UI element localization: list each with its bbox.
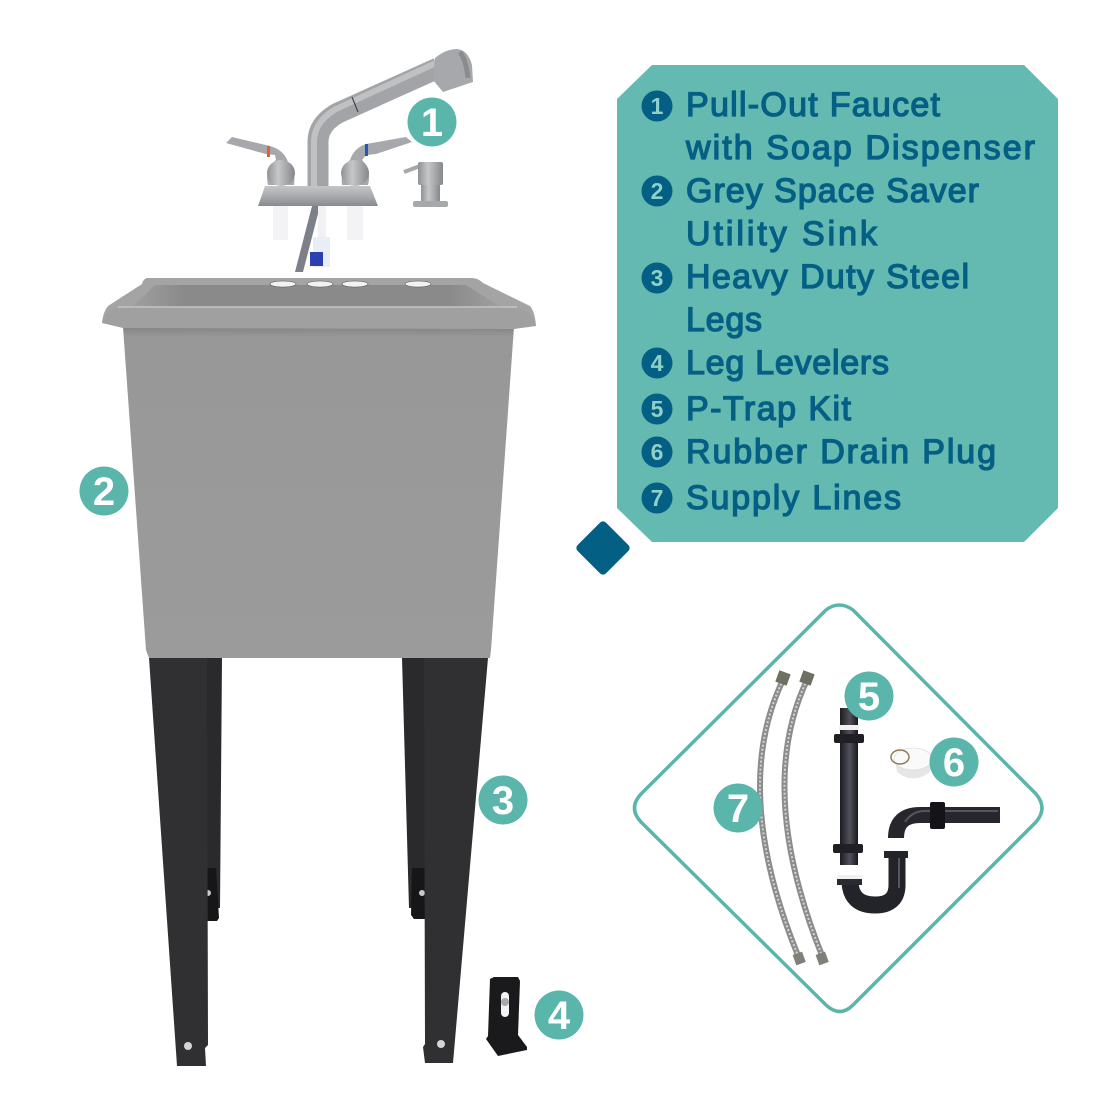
leg leveler xyxy=(486,977,527,1056)
number badge 3: 3 xyxy=(492,779,514,823)
right handle xyxy=(341,137,412,186)
number badge 3 xyxy=(478,776,528,824)
decorative diamond accent xyxy=(575,520,631,576)
number badge 1: 1 xyxy=(421,101,443,145)
number badge 1 xyxy=(408,98,456,146)
rim highlight xyxy=(118,306,517,308)
supply connector xyxy=(310,206,330,267)
spray head xyxy=(433,49,473,92)
tub rim back xyxy=(102,278,536,326)
list item 3: Heavy Duty Steel Legs: Heavy Duty Steel xyxy=(686,258,969,296)
faucet holes xyxy=(270,281,431,287)
list item 3: Heavy Duty Steel Legs xyxy=(642,258,969,339)
list item 3: Heavy Duty Steel Legs: 3 xyxy=(651,265,663,291)
list item 6: Rubber Drain Plug: 6 xyxy=(651,439,663,465)
braided hose xyxy=(295,206,320,272)
list item 1: Pull-Out Faucet with Soap Dispenser: Pull-Out Faucet xyxy=(686,86,941,124)
number badge 5: 5 xyxy=(858,675,880,719)
number badge 6: 6 xyxy=(943,741,965,785)
list item 7: Supply Lines: 7 xyxy=(651,485,663,511)
left leg xyxy=(149,658,222,1066)
soap dispenser xyxy=(404,162,448,207)
list item 1: Pull-Out Faucet with Soap Dispenser xyxy=(642,86,1035,167)
panel: plumbing kit diamond xyxy=(634,605,1042,1012)
list item 2: Grey Space Saver Utility Sink xyxy=(642,172,979,253)
number badge 2: 2 xyxy=(93,470,115,514)
tailpiece pipe xyxy=(840,708,858,865)
list item 4: Leg Levelers: Leg Levelers xyxy=(686,344,889,382)
supply lines xyxy=(760,670,829,965)
list item 6: Rubber Drain Plug: Rubber Drain Plug xyxy=(686,433,996,471)
list item 4: Leg Levelers: 4 xyxy=(651,350,664,376)
white tailpieces xyxy=(273,206,288,240)
trap arm xyxy=(896,815,1000,838)
U-bend xyxy=(850,855,897,905)
number badge 7 xyxy=(714,784,762,832)
list item 1: Pull-Out Faucet with Soap Dispenser: with Soap Dispenser xyxy=(685,129,1035,167)
panel: parts list xyxy=(617,65,1058,542)
faucet deck plate xyxy=(258,186,378,206)
rubber drain plug xyxy=(891,748,932,778)
number badge 4: 4 xyxy=(548,994,571,1038)
number badge 5 xyxy=(844,672,894,720)
left handle xyxy=(226,137,295,186)
number badge 7: 7 xyxy=(727,787,749,831)
list item 2: Grey Space Saver Utility Sink: Grey Space Saver xyxy=(686,172,979,210)
number badge 4 xyxy=(534,990,584,1040)
sink legs xyxy=(149,658,488,1066)
list item 5: P-Trap Kit: 5 xyxy=(651,396,664,422)
list item 5: P-Trap Kit: P-Trap Kit xyxy=(686,390,852,428)
list item 7: Supply Lines: Supply Lines xyxy=(686,479,901,517)
number badge 6 xyxy=(930,738,978,786)
tub rim front xyxy=(102,307,536,329)
P-trap kit xyxy=(833,708,1000,905)
list item 2: Grey Space Saver Utility Sink: 2 xyxy=(651,178,663,204)
sink tub xyxy=(102,278,536,658)
faucet xyxy=(226,49,473,272)
spout xyxy=(318,68,438,186)
list item 2: Grey Space Saver Utility Sink: Utility Sink xyxy=(686,215,878,253)
number badge 2 xyxy=(80,466,128,516)
list item 3: Heavy Duty Steel Legs: Legs xyxy=(686,301,762,339)
tub body xyxy=(123,327,514,658)
list item 1: Pull-Out Faucet with Soap Dispenser: 1 xyxy=(651,93,664,119)
right leg xyxy=(402,658,488,1063)
tub basin interior xyxy=(132,285,501,307)
